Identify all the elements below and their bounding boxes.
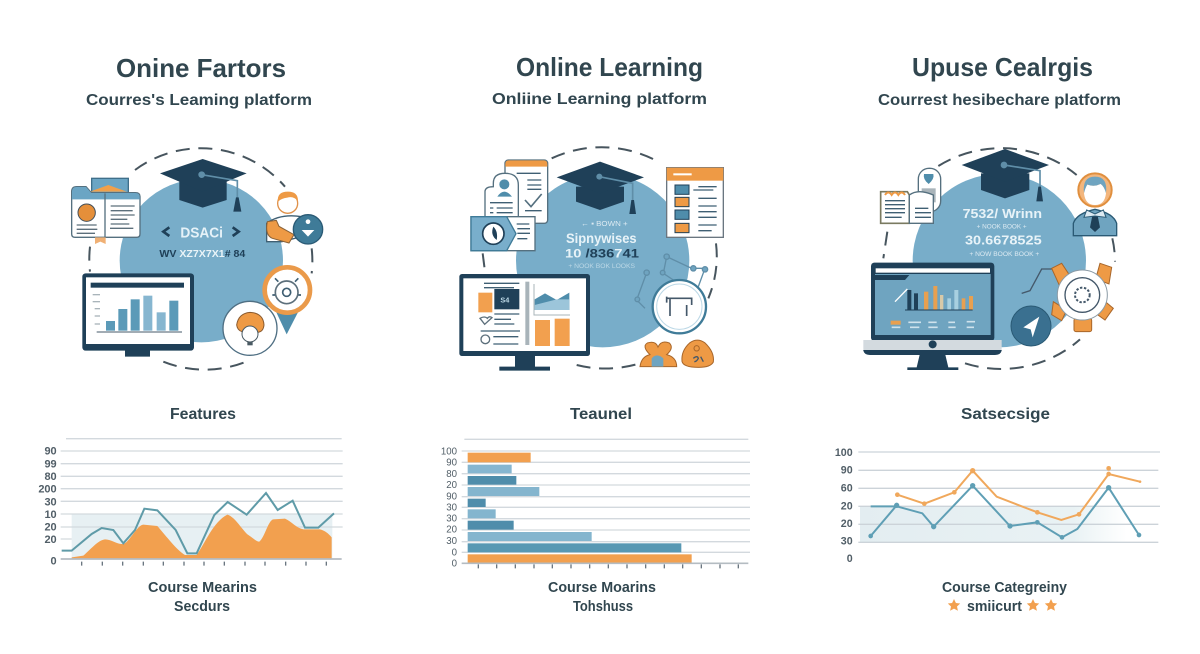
icon: people and money bag [640, 340, 713, 367]
chart plot: 0 [452, 559, 457, 570]
chart plot: 0 [847, 553, 853, 565]
chart plot: 30 [44, 496, 57, 508]
chart plot: 30 [841, 535, 853, 547]
blue hub circle [516, 174, 689, 347]
hub text: + NOW BOOK BOOK + [969, 252, 1040, 258]
chart caption [148, 580, 257, 615]
chart plot: 10 [44, 509, 57, 521]
icon: graduation cap [557, 162, 644, 214]
title: column 2: Online Learning [516, 52, 703, 82]
icon: checklist panel [667, 168, 723, 237]
icon: orange map pin [265, 267, 310, 334]
chart caption with stars [942, 580, 1067, 615]
chart plot: 90 [44, 446, 57, 458]
chart plot: 20 [841, 518, 853, 530]
subtitle: column 2: Onliine Learning platform [492, 91, 707, 108]
chart plot: 200 [38, 484, 57, 496]
chart plot [441, 439, 750, 570]
chart: dual line [835, 406, 1160, 615]
panel: online learning [441, 52, 750, 615]
panel: online factors [38, 53, 343, 615]
chart caption: Course Moarins [548, 580, 656, 596]
chart heading: Teaunel [570, 406, 632, 423]
subtitle: column 1: Courres's Leaming platform [86, 92, 312, 109]
hub text: 7532/ Wrinn [963, 206, 1042, 221]
chart plot: 20 [446, 480, 457, 491]
hub text: ← ▪ BOWN + [581, 219, 628, 228]
chart plot: 20 [44, 534, 57, 546]
chart plot: 99 [44, 458, 57, 470]
title: column 3: Upuse Cealrgis [912, 52, 1093, 82]
subtitle: column 3: Courrest hesibechare platform [878, 92, 1121, 109]
icon: graduation cap [160, 159, 247, 212]
chart plot: 30 [446, 502, 457, 513]
icon: gear lightbulb [1022, 263, 1113, 332]
icon: open book with pin card [881, 168, 941, 223]
chart plot: 80 [44, 471, 57, 483]
chart plot: 0 [51, 555, 57, 567]
chart plot: 20 [446, 525, 457, 536]
icon: compass [1011, 306, 1051, 346]
dashed orbit ring [483, 147, 717, 369]
chart plot: 20 [841, 501, 853, 513]
chart plot: 30 [446, 536, 457, 547]
chart caption: Secdurs [174, 599, 230, 615]
chart plot: 60 [841, 483, 853, 495]
hub text: WV XZ7X7X1# 84 [159, 249, 246, 260]
panel: course categories [835, 52, 1160, 615]
chart caption with stars: smiicurt [967, 599, 1022, 615]
blue hub circle [120, 179, 283, 342]
hub text [963, 206, 1042, 258]
icon: stacked documents [471, 160, 548, 251]
chart caption with stars: Course Categreiny [942, 580, 1067, 596]
chart caption: Course Mearins [148, 580, 257, 596]
chart heading: Satsecsige [961, 406, 1050, 423]
illustration: column 1 hub [72, 148, 323, 370]
icon: graduation cap [962, 149, 1049, 201]
illustration: column 3 hub [863, 148, 1117, 370]
chart plot: 90 [841, 465, 853, 477]
hub text [565, 219, 639, 270]
icon: person with badge [267, 192, 323, 244]
blue hub circle [913, 174, 1086, 347]
title: column 1: Onine Fartors [116, 53, 286, 83]
icon: lightbulb idea circle [223, 301, 277, 355]
icon: desktop monitor bar chart [82, 273, 194, 357]
icon: person avatar [1073, 173, 1117, 236]
chart plot: 100 [835, 447, 853, 459]
hub text: + NOOK BOK LOOKS [568, 264, 635, 270]
dashed orbit ring [883, 148, 1115, 369]
chart plot: 0 [452, 548, 457, 559]
chart plot: 30 [446, 513, 457, 524]
chart plot: 20 [44, 522, 57, 534]
icon: network nodes [635, 254, 708, 308]
illustration: column 2 hub [459, 147, 723, 371]
chart plot [835, 447, 1160, 565]
icon: desktop monitor dashboard: S4 [500, 295, 510, 304]
chart caption: Tohshuss [573, 599, 633, 615]
chart: area and line [38, 406, 343, 615]
hub text: + NOOK BOOK + [977, 225, 1027, 231]
chart: horizontal bars [441, 406, 750, 615]
icon: desktop monitor dashboard [459, 274, 590, 371]
hub text [159, 225, 246, 260]
chart plot: 90 [446, 492, 457, 503]
chart heading: Features [170, 406, 236, 423]
hub text: DSACi [180, 225, 223, 241]
chart plot: 90 [446, 458, 457, 469]
icon: magnifier circle [653, 280, 706, 333]
chart caption [548, 580, 656, 615]
hub text: 30.6678525 [965, 233, 1042, 248]
hub text: Sipnywises [566, 230, 637, 246]
icon: folder with profile [72, 178, 140, 244]
chart plot: 80 [446, 469, 457, 480]
dashed orbit ring [89, 148, 312, 370]
icon: laptop monitor dashboard [863, 263, 1002, 370]
chart plot [38, 439, 343, 567]
hub text: 10 /836741 [565, 247, 639, 261]
chart plot: 100 [441, 447, 457, 458]
